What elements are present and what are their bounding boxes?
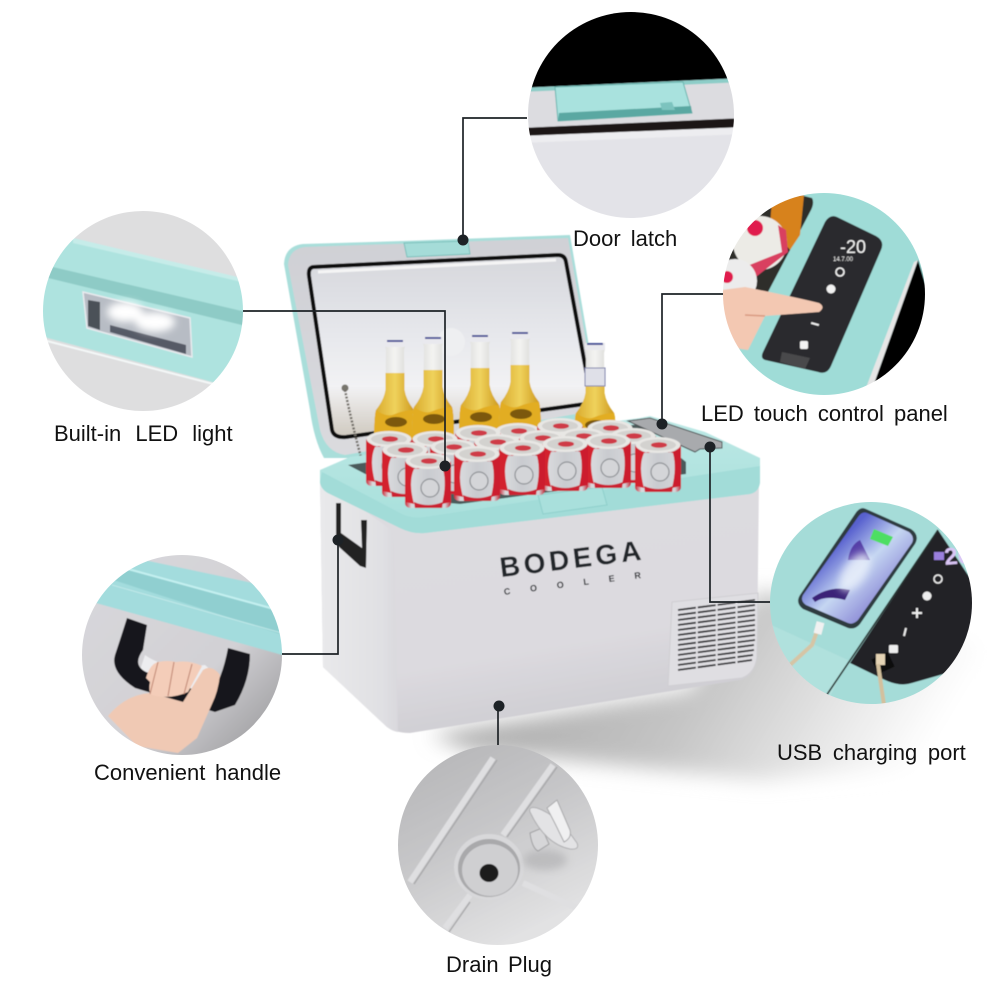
label: LED touch control panel: LED touch control panel [701,401,948,426]
cooler product [284,235,760,733]
label: built-in LED light: Built-in LED light [54,421,233,446]
cans and beer [770,195,804,250]
hand [722,287,822,350]
bottles [374,332,616,449]
photo: door latch [528,12,734,218]
logo: BODEGA [498,535,643,583]
USB port and cable [871,652,895,674]
leader line [282,540,338,654]
label: USB charging port: USB charging port [777,740,966,765]
lid [284,235,608,458]
beverage cans [366,418,681,508]
panel [850,530,978,684]
photo: LED light [40,208,246,414]
photo: handle [78,552,286,760]
floor shadow [430,590,1000,780]
drain chain [342,384,366,476]
lid gasket [309,255,592,437]
callout: door latch [458,10,745,251]
photo: drain plug [395,742,601,948]
handle grip [114,618,250,712]
photo: USB port: 20 [943,542,972,571]
leader line [243,311,445,466]
callout: USB charging port [704,442,978,765]
black background [874,260,925,382]
photo: control panel [723,193,925,395]
callout: LED touch control panel [656,190,948,430]
photo: control panel: 14.7.00 [833,257,854,263]
door latch on lid [404,241,470,257]
leader line [497,706,499,745]
callout: convenient handle [78,534,344,785]
teal rim [320,416,760,533]
control icons [836,268,844,276]
phone [798,508,917,628]
leader line [662,294,723,424]
callout: drain plug [395,700,601,977]
callout: built-in LED light [40,208,450,472]
label: convenient handle: Convenient handle [94,760,281,785]
photo: control panel: -20 [840,237,866,257]
leader line [710,447,770,602]
label: drain plug: Drain Plug [446,952,552,977]
leader line [463,118,527,240]
cooler body [320,478,759,733]
logo: COOLER [503,570,642,597]
LED window [83,292,192,357]
side handle [336,503,367,568]
control face [762,216,882,373]
phone cable [790,632,818,666]
photo: USB port [765,498,978,710]
panel icons [934,575,942,583]
vent grille [668,593,758,686]
plug [523,850,567,870]
label: door latch: Door latch [573,226,677,251]
latch [555,82,692,121]
hand [108,661,220,753]
